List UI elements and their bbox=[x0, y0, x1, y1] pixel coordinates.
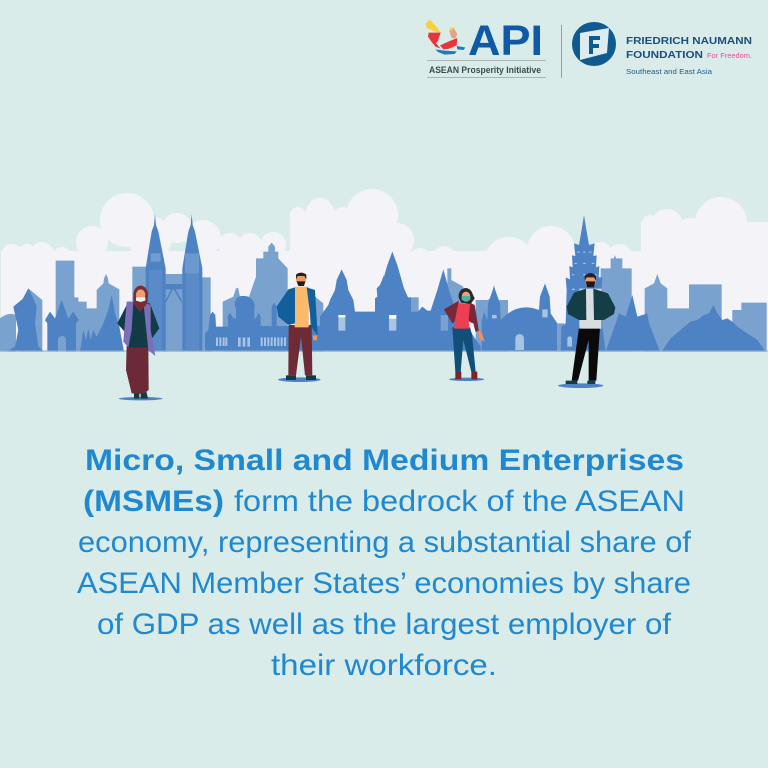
person: man in blue jacket bbox=[277, 273, 321, 382]
icon: F circle bbox=[572, 22, 616, 66]
body text: ASEAN Member States’ economies by share bbox=[77, 567, 691, 600]
logo: Friedrich Naumann Foundation bbox=[572, 22, 752, 76]
person: woman with mask bbox=[444, 288, 485, 381]
body text: form the bedrock of the ASEAN bbox=[234, 485, 685, 518]
clouds bbox=[1, 189, 768, 351]
icon: ASEAN map bbox=[425, 19, 465, 55]
logo wordmark API: API bbox=[468, 17, 543, 65]
skyline bbox=[0, 214, 768, 352]
logo: Friedrich Naumann Foundation: Southeast and East Asia bbox=[626, 67, 713, 76]
skyline: left half bbox=[0, 214, 384, 352]
person: woman in hijab bbox=[117, 286, 163, 400]
body text bbox=[77, 444, 692, 682]
logo: ASEAN Prosperity Initiative bbox=[425, 17, 546, 78]
logo tagline: ASEAN Prosperity Initiative bbox=[429, 65, 541, 76]
logo: Friedrich Naumann Foundation: FOUNDATION bbox=[626, 49, 703, 61]
body text: economy, representing a substantial share of bbox=[78, 526, 692, 559]
logo: Friedrich Naumann Foundation: For Freedom. bbox=[707, 51, 752, 60]
body text: (MSMEs) bbox=[83, 485, 224, 518]
body text: their workforce. bbox=[271, 649, 497, 682]
person: man in dark jacket bbox=[558, 273, 615, 388]
logo: Friedrich Naumann Foundation: FRIEDRICH NAUMANN bbox=[626, 35, 752, 47]
skyline: right half bbox=[384, 215, 767, 352]
body text: of GDP as well as the largest employer of bbox=[97, 608, 672, 641]
body text: Micro, Small and Medium Enterprises bbox=[85, 444, 684, 477]
